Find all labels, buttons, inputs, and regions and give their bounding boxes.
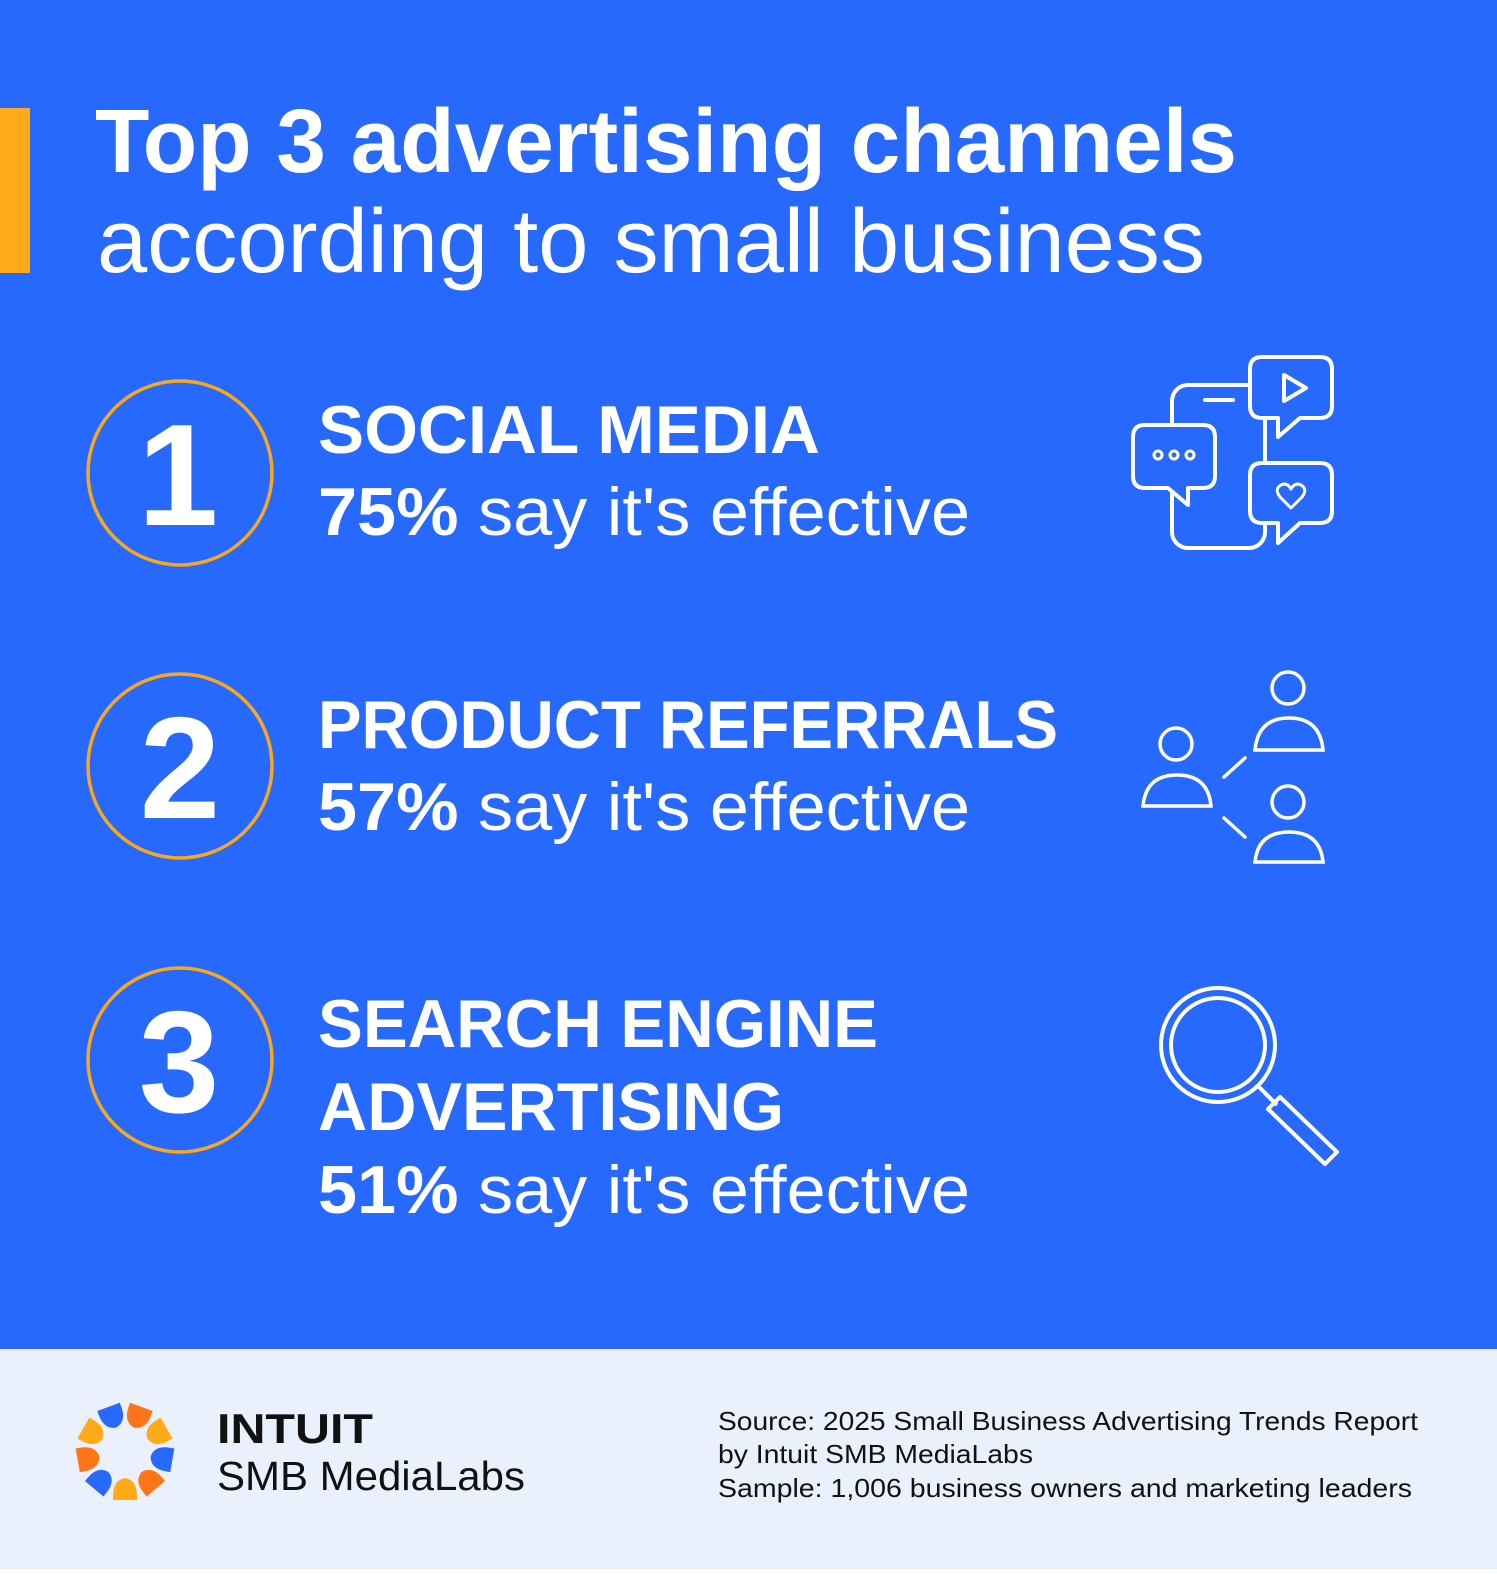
logo wordmark: INTUIT [217,1405,373,1452]
heading 3: ADVERTISING [318,1069,784,1145]
stat 1: 75% say it's effective [318,474,970,550]
title [95,92,1237,292]
stat 3: 51% say it's effective [318,1152,970,1228]
icon: people referral [1143,672,1323,862]
icon: social media [1133,357,1332,548]
number badge 3: 3 [139,981,219,1143]
number badge 3 [88,968,272,1152]
heading 3 [318,986,878,1145]
logo [76,1403,525,1503]
item 2: product referrals [88,672,1323,862]
heading 2: PRODUCT REFERRALS [318,687,1058,763]
title: Top 3 advertising channels [95,92,1237,192]
icon: magnifier [1161,988,1337,1164]
stat 2: 57% say it's effective [318,769,970,845]
item 1: social media [88,357,1332,565]
number badge 2 [88,674,272,858]
title: according to small business [97,192,1205,292]
source text [718,1406,1419,1503]
source text: Source: 2025 Small Business Advertising Trends Report [718,1406,1419,1436]
number badge 2: 2 [140,687,220,849]
source text: Sample: 1,006 business owners and marketing leaders [718,1473,1412,1503]
heading 3: SEARCH ENGINE [318,986,878,1062]
footer panel [0,1349,1497,1569]
logo wordmark [217,1405,525,1499]
heading 1: SOCIAL MEDIA [318,392,820,468]
number badge 1 [88,381,272,565]
item 3: search engine advertising [88,968,1337,1228]
logo wordmark: SMB MediaLabs [217,1453,525,1499]
accent bar [0,108,30,273]
logo mark [76,1403,174,1503]
number badge 1: 1 [138,394,218,556]
source text: by Intuit SMB MediaLabs [718,1439,1033,1469]
